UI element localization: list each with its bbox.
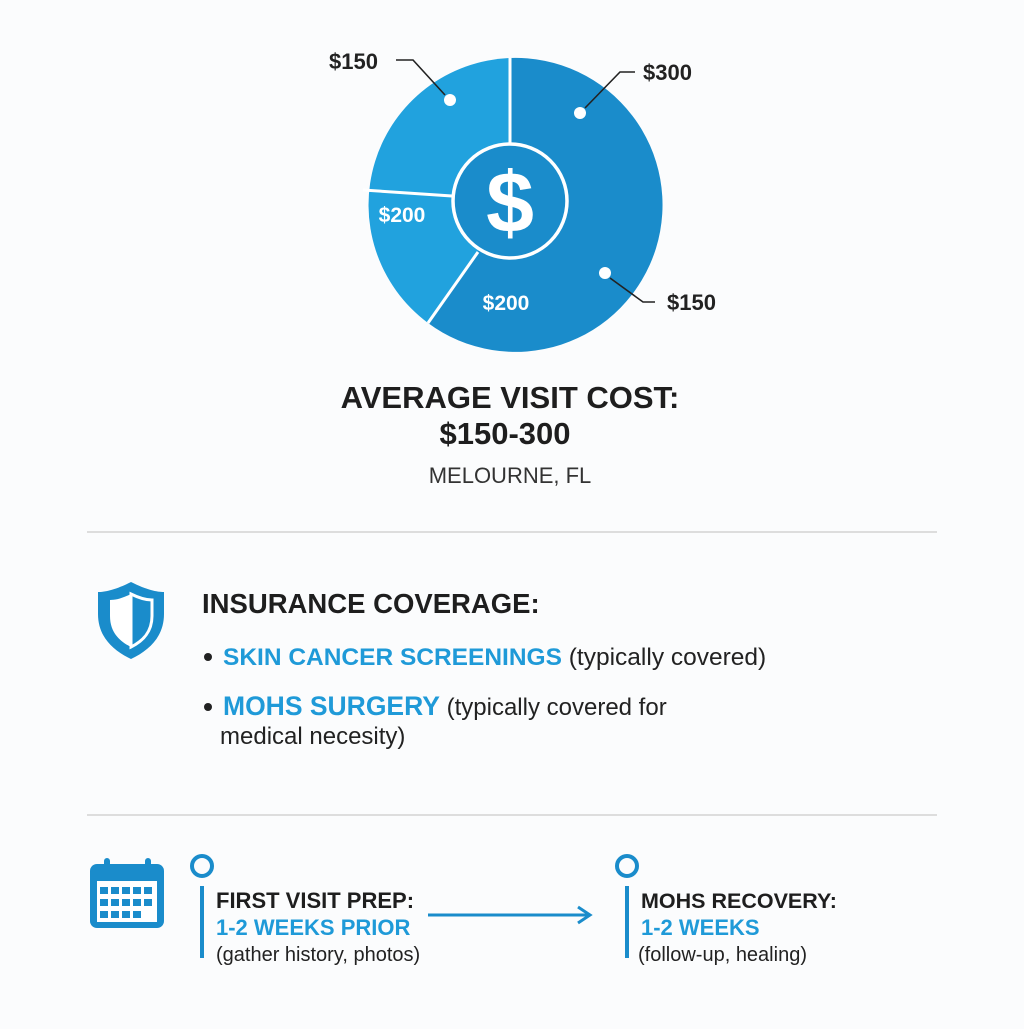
insurance heading: INSURANCE COVERAGE: (202, 588, 540, 619)
timeline step 2: MOHS RECOVERY: (641, 889, 837, 913)
pie chart: $150 (667, 290, 716, 315)
timeline step 2 (617, 856, 837, 966)
bullet list: medical necesity) (220, 723, 405, 750)
timeline step 1: FIRST VISIT PREP: (216, 888, 414, 913)
title: AVERAGE VISIT COST: (341, 380, 679, 415)
title: MELOURNE, FL (429, 463, 591, 488)
arrow (428, 907, 590, 923)
timeline step 2: (follow-up, healing) (638, 944, 807, 966)
bullet list: MOHS SURGERY (typically covered for (223, 691, 667, 721)
icon: shield (98, 582, 164, 659)
bullet list: SKIN CANCER SCREENINGS (typically covered) (223, 644, 766, 671)
icon: calendar (90, 858, 164, 928)
pie chart: $300 (643, 60, 692, 85)
pie chart (329, 49, 716, 352)
pie chart: $200 (483, 292, 529, 315)
bullet list (204, 644, 766, 750)
timeline step 1 (192, 856, 420, 966)
title: $150-300 (439, 416, 571, 451)
timeline step 1: (gather history, photos) (216, 944, 420, 966)
timeline step 1: 1-2 WEEKS PRIOR (216, 915, 410, 940)
pie chart: $200 (379, 204, 425, 227)
pie chart: $150 (329, 49, 378, 74)
timeline step 2: 1-2 WEEKS (641, 915, 760, 940)
icon: dollar: $ (486, 155, 534, 251)
title (341, 380, 679, 488)
